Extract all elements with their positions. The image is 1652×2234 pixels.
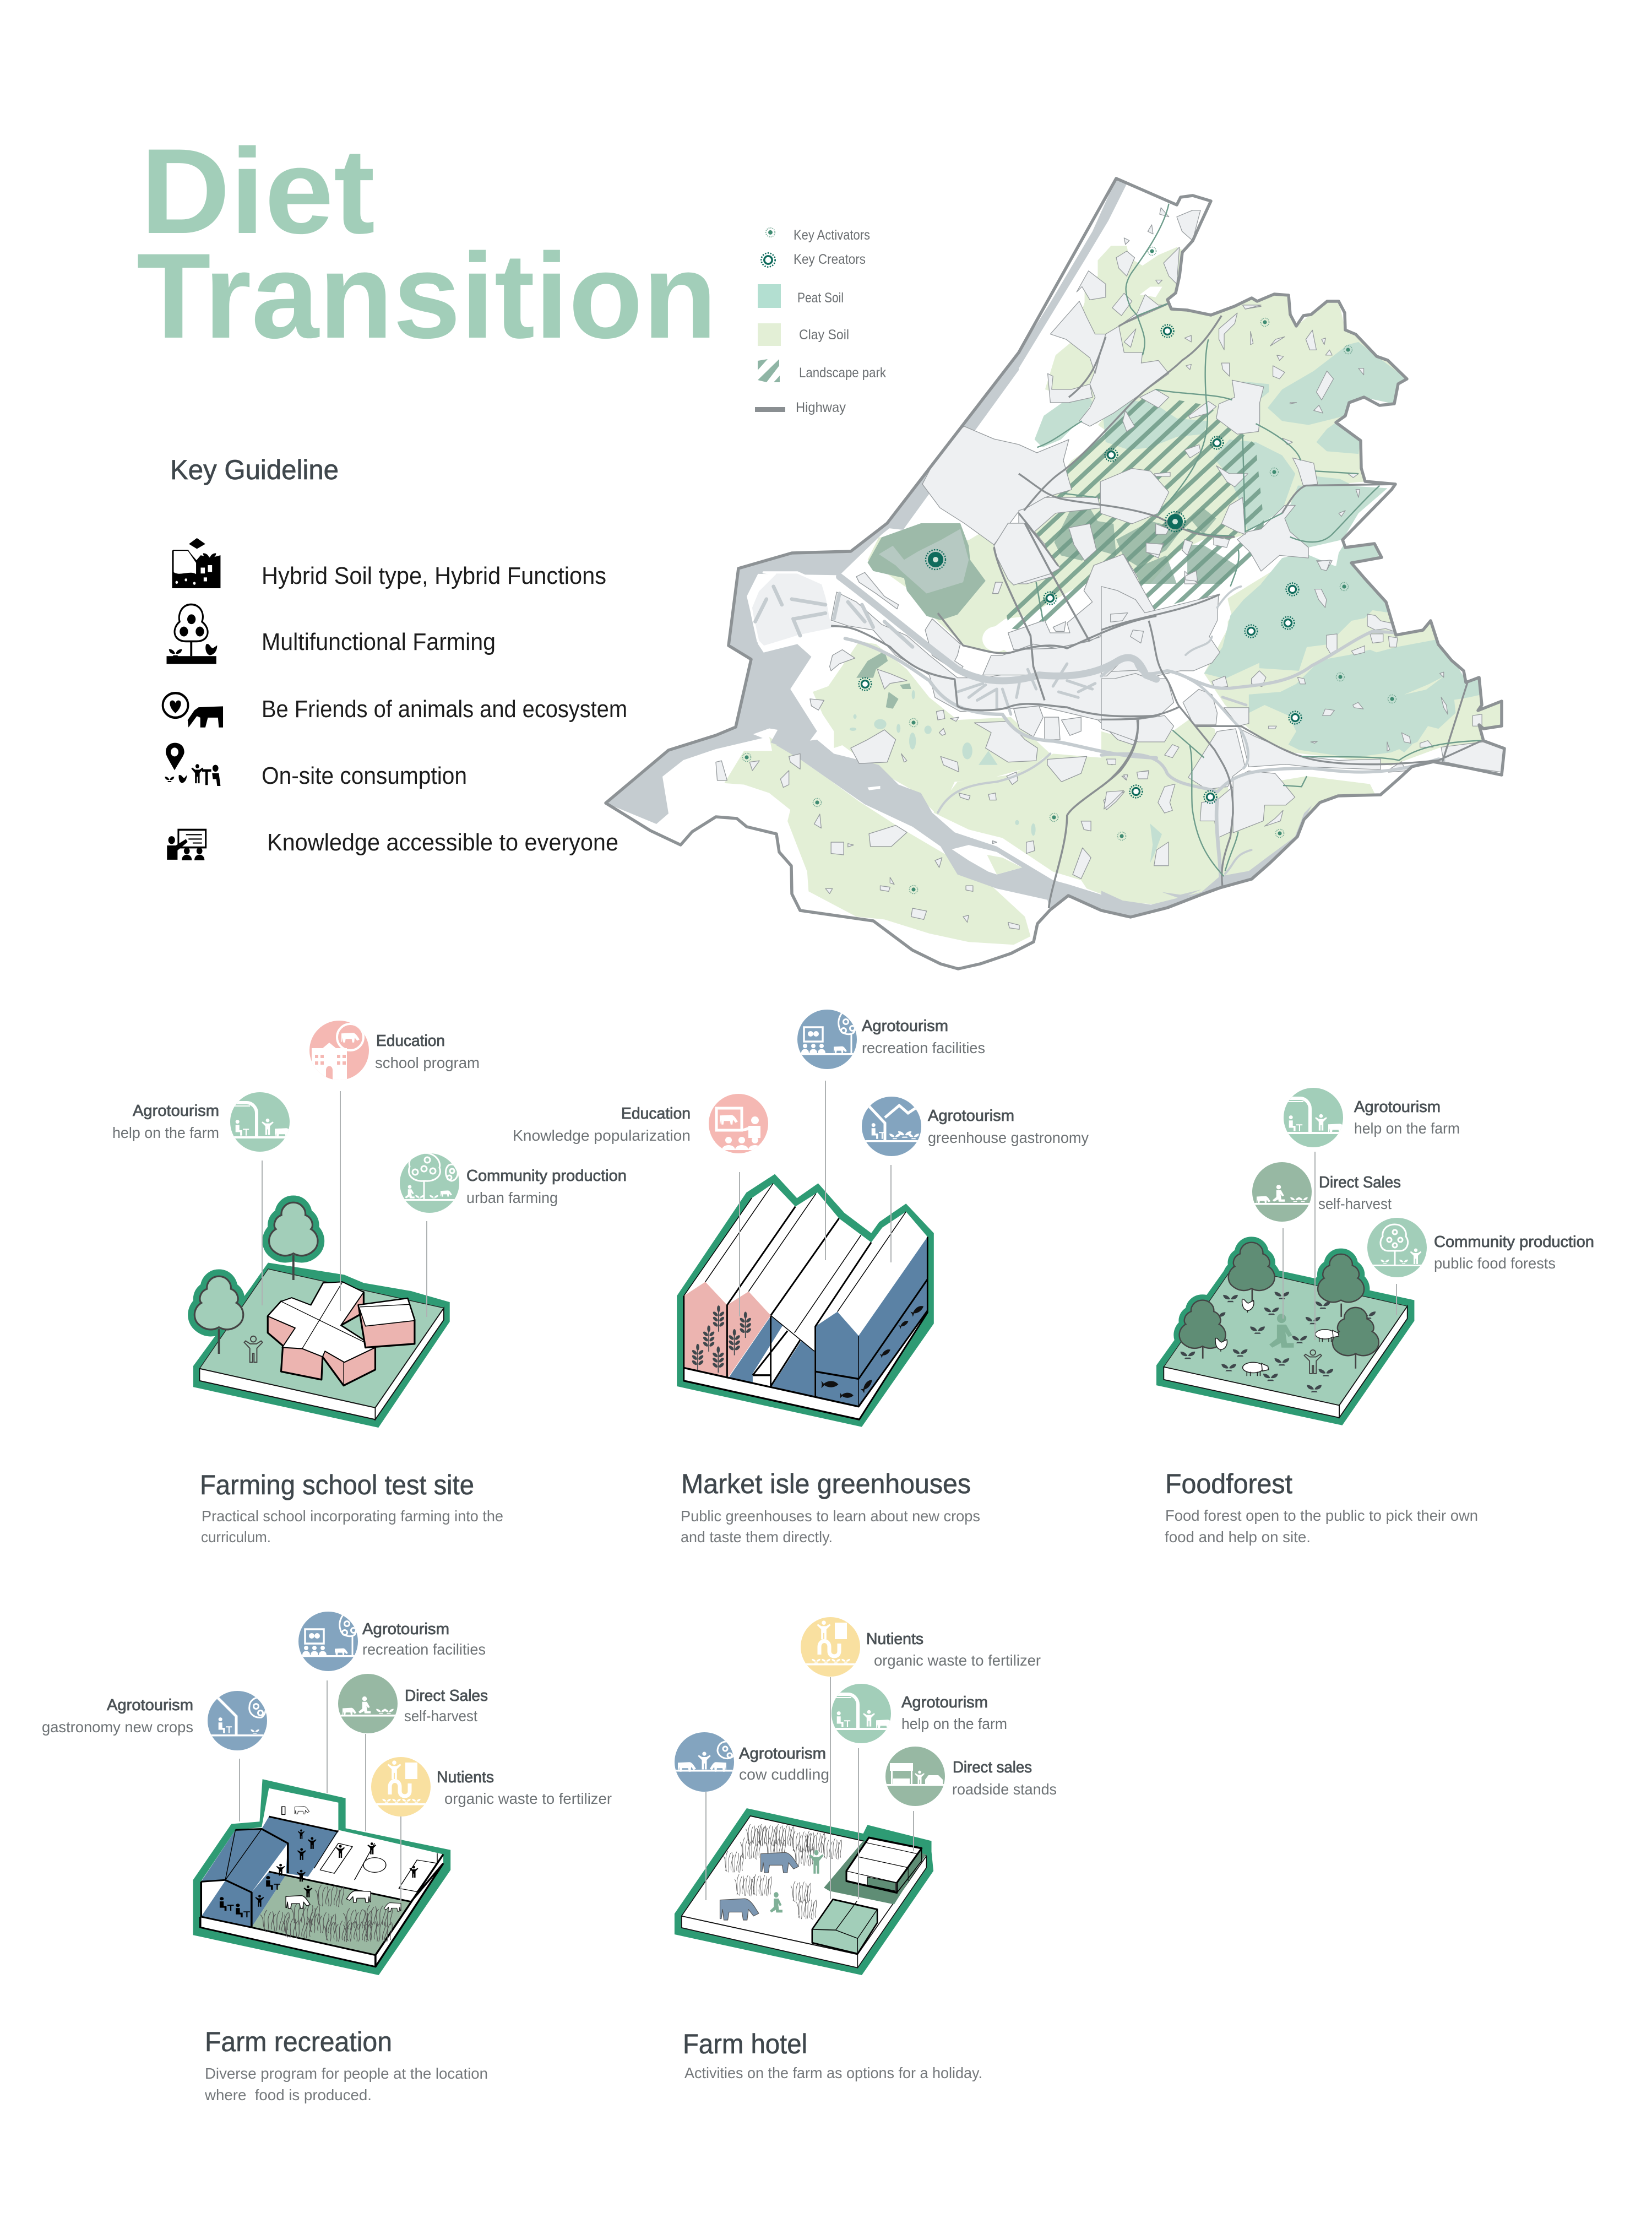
clay soil areas — [724, 246, 1502, 945]
callout: nutrients organic waste: organic waste to fertilizer — [444, 1790, 612, 1807]
guideline list: Hybrid Soil type, Hybrid Functions — [262, 562, 606, 589]
callout: agrotourism greenhouse gastronomy — [862, 1097, 1089, 1262]
description: foodforest: Food forest open to the public to pick their own — [1165, 1507, 1478, 1524]
legend: clay soil: Clay Soil — [799, 327, 849, 343]
heading: farm hotel: Farm hotel — [683, 2029, 807, 2059]
key activator markers — [742, 247, 1396, 893]
description: farm hotel: Activities on the farm as options for a holiday. — [684, 2064, 982, 2081]
callout: direct sales self-harvest: Direct Sales — [405, 1687, 488, 1705]
callout: agrotourism recreation facilities: Agrotourism — [862, 1017, 948, 1035]
callout: agrotourism help on the farm: Agrotourism — [901, 1694, 988, 1711]
description: market isle: Public greenhouses to learn about new crops — [681, 1508, 980, 1525]
structure lines — [684, 1183, 927, 1419]
callout: direct sales self-harvest — [338, 1674, 488, 1831]
guideline list: Knowledge accessible to everyone — [267, 829, 618, 856]
guideline list: Multifunctional Farming — [262, 628, 496, 655]
callout: agrotourism recreation facilities — [797, 1010, 985, 1260]
callout: agrotourism recreation facilities: recreation facilities — [362, 1641, 486, 1658]
description: foodforest: food and help on site. — [1165, 1528, 1311, 1546]
heading: market isle greenhouses: Market isle greenhouses — [681, 1468, 971, 1499]
heading: farming school test site: Farming school test site — [200, 1470, 474, 1500]
panel: market isle greenhouses — [513, 1010, 1089, 1546]
callout: agrotourism help on the farm — [832, 1684, 1007, 1899]
callout: education school program: school program — [375, 1054, 480, 1071]
panel: farming school test site — [112, 1021, 627, 1546]
callout: agrotourism help on the farm: help on the farm — [1354, 1120, 1460, 1137]
callout: community production urban farming: urban farming — [466, 1189, 558, 1206]
wheat plants — [692, 1305, 752, 1373]
callout: education knowledge popularization — [513, 1094, 768, 1316]
guideline list — [262, 562, 627, 856]
heading: key guideline: Key Guideline — [170, 454, 339, 485]
grass tufts — [260, 1885, 392, 1942]
callout: direct sales self-harvest: self-harvest — [1318, 1195, 1392, 1212]
urban areas — [716, 208, 1504, 929]
panel: farm recreation — [42, 1612, 612, 2103]
title: Transition — [137, 228, 717, 364]
legend: highway — [755, 400, 846, 415]
callout: agrotourism gastronomy new crops — [42, 1691, 267, 1821]
description: farming school: curriculum. — [201, 1528, 271, 1546]
icon: animal friends — [163, 693, 223, 728]
plants — [1181, 1292, 1376, 1392]
description: market isle: and taste them directly. — [681, 1528, 833, 1546]
icon: hybrid soil — [172, 538, 220, 588]
peat soil areas — [850, 342, 1482, 863]
icon: multifunctional tree — [167, 604, 217, 664]
thin green canals — [1036, 204, 1481, 876]
small green house — [812, 1899, 877, 1954]
callout: agrotourism help on the farm — [112, 1092, 293, 1305]
callout: education school program: Education — [376, 1032, 445, 1050]
callout: agrotourism cow cuddling: cow cuddling — [739, 1766, 829, 1783]
callout: community production urban farming: Community production — [466, 1167, 627, 1185]
callout: direct sales self-harvest — [1252, 1162, 1401, 1319]
title: Diet — [140, 123, 375, 259]
callout: agrotourism greenhouse gastronomy: Agrotourism — [928, 1107, 1014, 1125]
callout: community production urban farming — [400, 1153, 627, 1317]
callout: agrotourism recreation facilities — [298, 1612, 486, 1793]
heading: farm recreation: Farm recreation — [205, 2026, 392, 2057]
callout: education knowledge popularization: Education — [621, 1105, 691, 1123]
trees — [194, 1202, 318, 1354]
description: foodforest — [1165, 1507, 1478, 1546]
panel: key guideline — [163, 454, 627, 860]
callout: agrotourism greenhouse gastronomy: greenhouse gastronomy — [928, 1129, 1089, 1146]
description: farming school: Practical school incorporating farming into the — [202, 1508, 503, 1525]
key creator markers — [859, 325, 1302, 803]
isometric: farm recreation — [193, 1779, 450, 1975]
hotel building — [846, 1837, 922, 1893]
callout: agrotourism cow cuddling: Agrotourism — [739, 1745, 826, 1763]
legend: landscape park — [758, 359, 886, 382]
map legend — [755, 227, 886, 415]
callout: direct sales self-harvest: Direct Sales — [1319, 1174, 1401, 1191]
callout: agrotourism help on the farm: Agrotourism — [133, 1102, 219, 1120]
small people — [220, 1807, 418, 1917]
light centre of west park — [879, 529, 969, 594]
white gaps — [982, 286, 1249, 768]
callout: direct sales self-harvest: self-harvest — [404, 1707, 477, 1725]
callout: agrotourism help on the farm: help on the farm — [901, 1715, 1007, 1732]
legend: key creators: Key Creators — [794, 252, 866, 267]
callout: direct sales roadside stands: roadside stands — [952, 1781, 1057, 1798]
rivers and harbours — [755, 577, 1444, 884]
description: farming school — [201, 1508, 503, 1546]
callout: agrotourism recreation facilities: Agrotourism — [362, 1620, 449, 1638]
callout: agrotourism cow cuddling — [675, 1732, 829, 1900]
grass field — [252, 1875, 411, 1955]
water: sea and estuary — [606, 178, 1312, 917]
province outline — [606, 178, 1504, 969]
map contents clipped to province — [606, 176, 1509, 975]
person outline — [1304, 1350, 1322, 1374]
callout: agrotourism help on the farm — [1284, 1088, 1460, 1340]
dark green trees — [1180, 1243, 1379, 1369]
callout: nutrients organic waste: Nutients — [866, 1630, 923, 1648]
guideline list: On-site consumption — [262, 762, 467, 789]
panel: foodforest — [1156, 1088, 1594, 1546]
legend: key activators — [766, 227, 870, 243]
landscape park hatching — [1007, 397, 1264, 633]
callout: agrotourism help on the farm: Agrotourism — [1354, 1098, 1441, 1116]
callout: nutrients organic waste: Nutients — [437, 1769, 494, 1786]
isometric: farm hotel — [675, 1808, 933, 1975]
person outline — [244, 1336, 263, 1362]
legend: key activators: Key Activators — [794, 227, 870, 243]
callout: agrotourism gastronomy new crops: Agrotourism — [107, 1696, 193, 1714]
panel: farm hotel — [675, 1617, 1057, 2081]
isometric: foodforest — [1156, 1243, 1414, 1425]
small building — [358, 1298, 415, 1348]
cows and people — [720, 1850, 824, 1920]
grass tufts — [724, 1824, 842, 1919]
legend: highway: Highway — [796, 400, 846, 415]
callout: nutrients organic waste — [801, 1617, 1041, 1899]
callout: direct sales roadside stands — [885, 1747, 1057, 1851]
callout: nutrients organic waste — [371, 1757, 612, 1902]
title — [137, 123, 717, 364]
kneeling person — [1269, 1314, 1294, 1348]
cross building — [268, 1282, 375, 1386]
guideline list: Be Friends of animals and ecosystem — [262, 696, 627, 723]
pink wall sections — [684, 1282, 771, 1377]
callout: community production public food forests: Community production — [1434, 1233, 1594, 1251]
callout: community production public food forests — [1367, 1218, 1594, 1315]
legend: peat soil — [758, 284, 844, 308]
icon: knowledge — [167, 829, 206, 860]
map: South Holland soil map — [606, 176, 1509, 975]
legend: peat soil: Peat Soil — [797, 290, 844, 306]
legend: landscape park: Landscape park — [799, 365, 886, 381]
legend: key creators — [761, 252, 866, 267]
callout: education school program — [309, 1021, 480, 1311]
callout: nutrients organic waste: organic waste to fertilizer — [874, 1652, 1041, 1669]
cows — [286, 1807, 401, 1911]
description: farm recreation — [204, 2065, 488, 2103]
estuary island — [868, 786, 1022, 875]
callout: agrotourism recreation facilities: recreation facilities — [862, 1039, 985, 1056]
fish — [821, 1304, 925, 1398]
legend: clay soil — [758, 323, 849, 346]
callout: education knowledge popularization: Knowledge popularization — [513, 1127, 691, 1144]
animals — [1215, 1299, 1339, 1376]
guideline icons — [163, 538, 223, 860]
description: farm recreation: where food is produced. — [204, 2086, 372, 2103]
icon: on-site consumption — [165, 743, 220, 786]
callout: agrotourism gastronomy new crops: gastronomy new crops — [42, 1718, 193, 1736]
dark patches: west park and landscape park — [856, 503, 1237, 709]
isometric: greenhouses — [677, 1174, 934, 1427]
heading: foodforest: Foodforest — [1165, 1468, 1292, 1499]
highways — [831, 304, 1482, 908]
callout: community production public food forests: public food forests — [1434, 1255, 1556, 1272]
description: market isle — [681, 1508, 980, 1546]
isometric: farming school — [193, 1202, 450, 1428]
callout: agrotourism help on the farm: help on the farm — [112, 1124, 219, 1141]
callout: direct sales roadside stands: Direct sales — [953, 1759, 1032, 1776]
blue wall sections — [729, 1237, 927, 1407]
dark green courtyard — [824, 1841, 926, 1905]
description: farm recreation: Diverse program for people at the location — [205, 2065, 488, 2082]
blue building and courtyard — [201, 1817, 338, 1927]
